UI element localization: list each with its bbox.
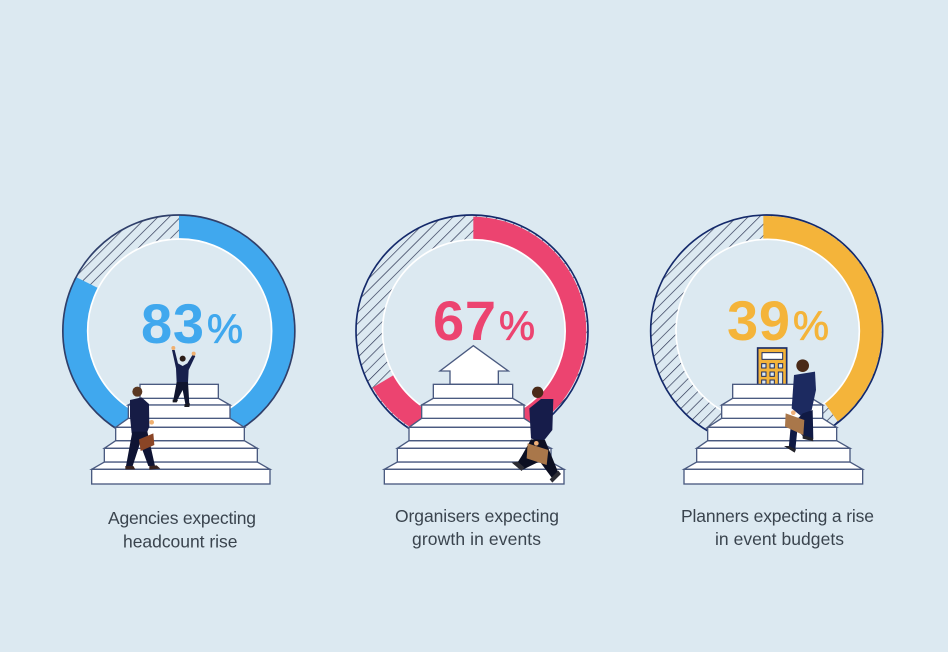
value: 39%: 39 (727, 289, 790, 352)
figure: man with briefcase (125, 387, 160, 470)
panel: agencies 83% (63, 215, 295, 552)
pink progress arc (373, 217, 586, 445)
caption: planners: in event budgets (715, 529, 844, 549)
stairs (92, 384, 270, 484)
panel: planners 39% (651, 215, 883, 549)
hatched remainder (356, 215, 588, 447)
caption: planners (681, 506, 874, 549)
inner white circle (676, 239, 859, 423)
value: 83%: 83 (141, 292, 204, 355)
inner white circle (382, 240, 565, 422)
hatched remainder (63, 215, 295, 447)
value: 83%: % (207, 306, 243, 352)
stairs (684, 384, 863, 484)
arrow (440, 346, 508, 384)
panel: organisers 67% (356, 215, 588, 549)
value: 39%: % (793, 303, 829, 349)
icon: calculator (758, 348, 787, 385)
gauge ring and stairs: organisers (356, 215, 588, 484)
value: 67%: 67 (433, 289, 496, 352)
figure: man walking up with briefcase (512, 387, 561, 483)
gauge ring and stairs: agencies (63, 215, 295, 484)
outer outline (63, 215, 295, 447)
blue progress arc (63, 216, 294, 446)
stairs (384, 384, 564, 484)
hatched remainder (651, 215, 883, 447)
caption: agencies: Agencies expecting (108, 508, 256, 528)
value: 67% (433, 289, 535, 352)
figure: man cheering on top step (171, 346, 196, 407)
caption: organisers: growth in events (412, 529, 541, 549)
outer outline (651, 215, 883, 447)
caption: agencies: headcount rise (123, 532, 238, 552)
caption: organisers (395, 506, 559, 549)
caption: planners: Planners expecting a rise (681, 506, 874, 526)
caption: agencies (108, 508, 256, 552)
outer outline (356, 215, 588, 447)
value: 39% (727, 289, 829, 352)
value: 67%: % (499, 303, 535, 349)
figure: man climbing with briefcase (784, 359, 816, 453)
gauge ring and stairs: planners (651, 215, 883, 484)
amber progress arc (763, 216, 882, 421)
caption: organisers: Organisers expecting (395, 506, 559, 526)
inner white circle (88, 239, 272, 423)
value: 83% (141, 292, 243, 355)
